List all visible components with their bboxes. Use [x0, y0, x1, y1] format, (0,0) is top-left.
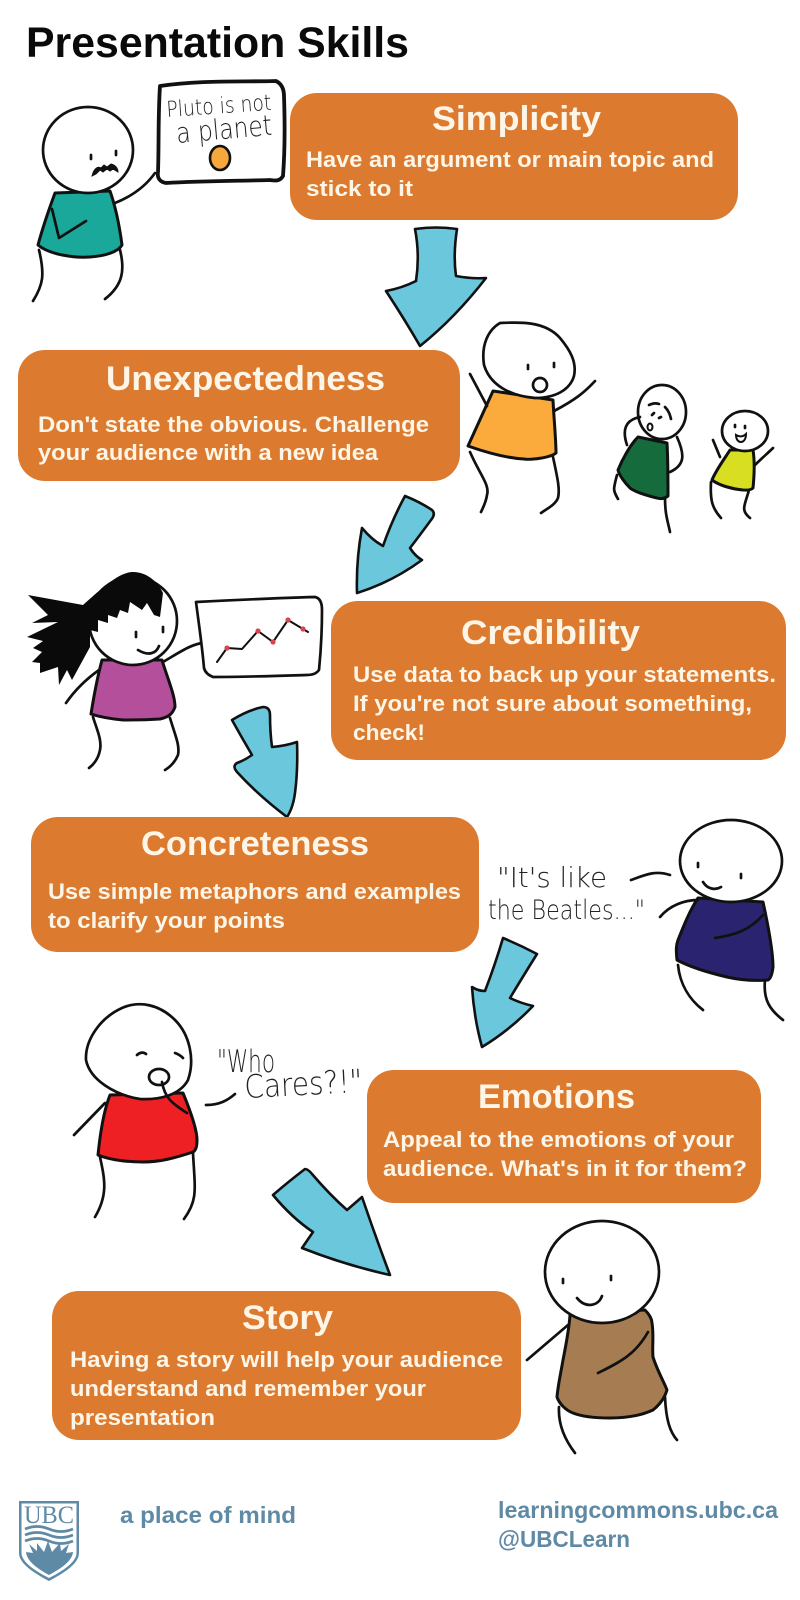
- panel: story: understand and remember your: [70, 1376, 426, 1401]
- figure: red person with who cares quote: Cares?!": [243, 1062, 363, 1106]
- panel: emotions: Appeal to the emotions of your: [383, 1127, 734, 1152]
- panel: emotions: audience. What's in it for them?: [383, 1156, 747, 1181]
- panel: story: presentation: [70, 1405, 215, 1430]
- hair: [27, 572, 163, 685]
- footer: website: learningcommons.ubc.ca: [498, 1497, 778, 1523]
- panel: credibility: Credibility: [461, 614, 640, 652]
- figure: teal presenter with sign: Pluto is not: [166, 91, 272, 123]
- arrow 2: [357, 496, 434, 593]
- panel: story: Having a story will help your audience: [70, 1347, 503, 1372]
- figure: ponytail person with chart: [27, 572, 322, 770]
- panel: story: Story: [242, 1299, 333, 1337]
- panel: credibility: check!: [353, 720, 425, 745]
- arrow 1: [386, 228, 486, 346]
- panel: simplicity: stick to it: [306, 176, 414, 201]
- figure: red person with who cares quote: [74, 1004, 363, 1219]
- panel: credibility: If you're not sure about something,: [353, 691, 752, 716]
- panel: emotions: Emotions: [478, 1078, 635, 1116]
- panel: concreteness: [31, 817, 479, 952]
- footer: tagline: a place of mind: [120, 1502, 296, 1528]
- panel: concreteness: Concreteness: [141, 825, 369, 863]
- figure: happy yellow person: [711, 411, 773, 518]
- figure: brown storyteller: [527, 1221, 677, 1453]
- arrow 3: [232, 707, 297, 817]
- figure: teal presenter with sign: a planet: [175, 109, 273, 150]
- panel: credibility: Use data to back up your statements.: [353, 662, 776, 687]
- panel: credibility: [331, 601, 786, 760]
- arrow 4: [472, 938, 537, 1047]
- panel: unexpectedness: your audience with a new idea: [38, 440, 378, 465]
- footer: twitter handle: @UBCLearn: [498, 1526, 630, 1552]
- panel: simplicity: [290, 93, 738, 220]
- figure: surprised orange person: [468, 323, 595, 513]
- panel: unexpectedness: Unexpectedness: [106, 360, 385, 398]
- panel: story: [52, 1291, 521, 1440]
- panel: concreteness: to clarify your points: [48, 908, 285, 933]
- footer: UBC logo: [19, 1501, 79, 1581]
- figure: red person with who cares quote: "Who: [217, 1044, 275, 1080]
- panel: simplicity: Have an argument or main topic and: [306, 147, 714, 172]
- figure: navy person with Beatles quote: "It's like: [497, 861, 607, 894]
- footer: UBC logo: UBC: [24, 1502, 74, 1529]
- arrow 5: [273, 1169, 390, 1275]
- figure: teal presenter with sign: [33, 81, 285, 301]
- panel: unexpectedness: [18, 350, 460, 481]
- title: Presentation Skills: [26, 19, 409, 67]
- line chart: [217, 620, 308, 662]
- panel: unexpectedness: Don't state the obvious. Challenge: [38, 412, 429, 437]
- figure: navy person with Beatles quote: the Beatles...": [488, 895, 645, 926]
- figure: navy person with Beatles quote: [488, 820, 783, 1020]
- panel: simplicity: Simplicity: [432, 100, 601, 138]
- figure: worried green person: [614, 385, 686, 532]
- panel: emotions: [367, 1070, 761, 1203]
- panel: concreteness: Use simple metaphors and examples: [48, 879, 461, 904]
